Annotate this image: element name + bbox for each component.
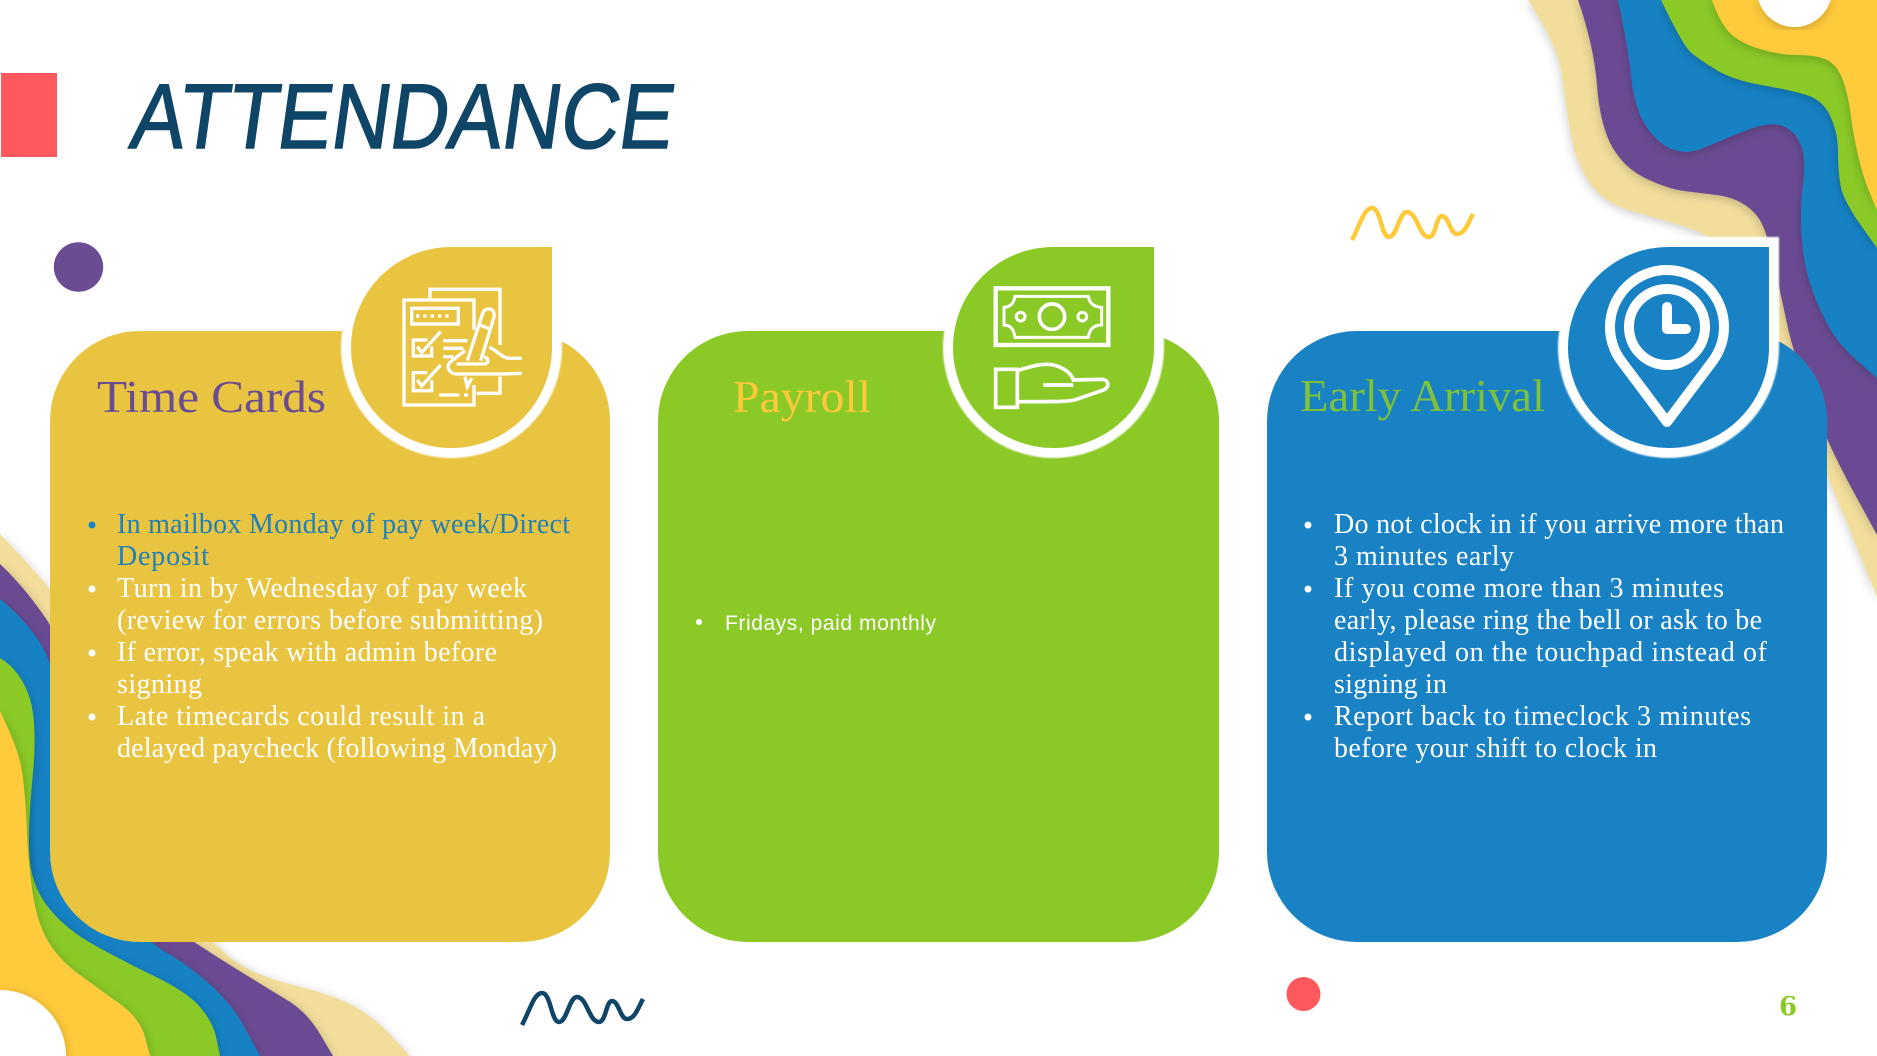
heading: early arrival: Early Arrival [1300, 371, 1545, 421]
bullet list: early arrival [1304, 509, 1784, 764]
bullet list: early arrival: early, please ring the bell or ask to be [1334, 605, 1762, 636]
panel: time cards [50, 237, 610, 942]
decorative paper waves: bottom left [0, 534, 410, 1056]
panel: early arrival [1267, 237, 1827, 942]
bullet list: time cards: If error, speak with admin before [117, 637, 497, 668]
bullet list: early arrival: If you come more than 3 minutes [1334, 573, 1724, 604]
bullet list: early arrival: Do not clock in if you arrive more than [1334, 509, 1784, 540]
bullet list: time cards: Deposit [117, 541, 209, 572]
bullet list: time cards: signing [117, 669, 202, 700]
navy squiggle [522, 993, 643, 1025]
bullet list: early arrival: 3 minutes early [1334, 541, 1514, 572]
purple dot [54, 242, 103, 292]
red dot [1286, 977, 1320, 1011]
decorative paper waves: top right [1528, 0, 1877, 597]
icon badge: time cards [341, 237, 562, 458]
bullet list: time cards: Turn in by Wednesday of pay week [117, 573, 527, 604]
bullet list: early arrival: Report back to timeclock 3 minutes [1334, 701, 1751, 732]
bullet list: time cards: delayed paycheck (following Monday) [117, 733, 557, 764]
bullet list: early arrival: displayed on the touchpad instead of [1334, 637, 1768, 668]
red accent rectangle [1, 73, 57, 157]
heading: payroll: Payroll [733, 372, 871, 422]
bullet list: payroll: Fridays, paid monthly [725, 612, 936, 635]
bullet list: time cards: (review for errors before submitting) [117, 605, 543, 636]
heading: time cards: Time Cards [97, 372, 326, 422]
icon badge: early arrival [1558, 237, 1779, 458]
title: ATTENDANCE [125, 64, 682, 168]
page number: 6 [1779, 992, 1797, 1022]
bullet list: early arrival: before your shift to clock in [1334, 733, 1657, 764]
yellow squiggle [1352, 208, 1473, 240]
bullet list: time cards: In mailbox Monday of pay week/Direct [117, 509, 570, 540]
bullet list: time cards [88, 509, 570, 764]
icon badge: payroll [943, 237, 1164, 458]
panel: payroll [658, 237, 1219, 942]
bullet list: time cards: Late timecards could result in a [117, 701, 486, 732]
bullet list: early arrival: signing in [1334, 669, 1447, 700]
